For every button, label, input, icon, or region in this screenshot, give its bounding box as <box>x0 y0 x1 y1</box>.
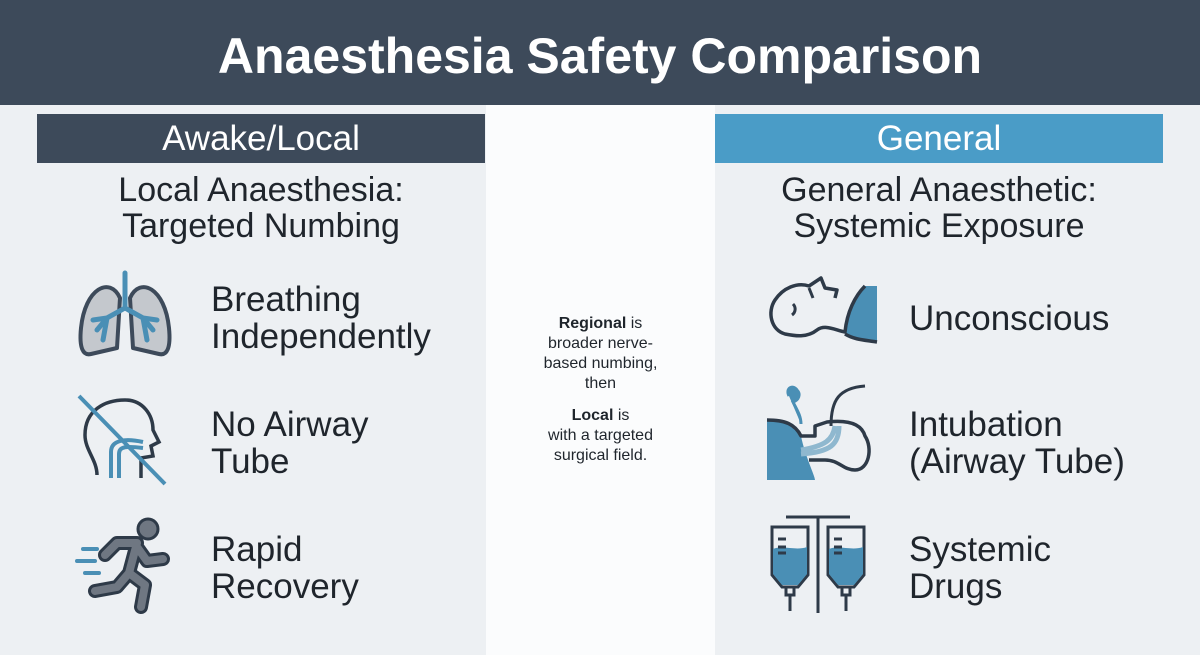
right subtitle: General Anaesthetic: <box>781 171 1097 209</box>
left header: Awake/Local <box>162 119 360 158</box>
left header <box>37 114 485 163</box>
icon: running person <box>75 518 170 614</box>
center column background <box>486 105 715 655</box>
text: rapid recovery <box>211 530 359 606</box>
left subtitle <box>118 171 404 245</box>
left subtitle: Local Anaesthesia: <box>118 171 404 209</box>
center note <box>544 315 657 464</box>
title bar: Anaesthesia Safety Comparison <box>218 28 982 84</box>
icon: lungs <box>78 270 172 356</box>
text: unconscious: Unconscious <box>909 299 1109 338</box>
text: systemic drugs: Systemic <box>909 530 1051 569</box>
right header: General <box>877 119 1001 158</box>
text: intubation <box>909 405 1125 481</box>
icon: intubation <box>767 384 871 480</box>
text: no airway: Tube <box>211 442 289 481</box>
text: rapid recovery: Rapid <box>211 530 302 569</box>
right header <box>715 114 1163 163</box>
center note: Regional is <box>559 315 642 332</box>
text: breathing <box>211 280 431 356</box>
text: systemic drugs: Drugs <box>909 567 1002 606</box>
right subtitle <box>781 171 1097 245</box>
icon: IV bags <box>770 516 866 613</box>
title bar <box>0 0 1200 105</box>
icon: unconscious head <box>769 276 878 344</box>
center note: surgical field. <box>554 447 647 464</box>
text: intubation: (Airway Tube) <box>909 442 1125 481</box>
text: rapid recovery: Recovery <box>211 567 359 606</box>
center note: based numbing, <box>544 355 657 372</box>
center note: broader nerve- <box>548 335 653 352</box>
text: no airway <box>211 405 369 481</box>
center note: with a targeted <box>548 427 653 444</box>
text: systemic drugs <box>909 530 1051 606</box>
icon: no airway tube <box>78 394 166 486</box>
text: no airway: No Airway <box>211 405 369 444</box>
text: breathing: Independently <box>211 317 431 356</box>
text: breathing: Breathing <box>211 280 361 319</box>
center note: then <box>585 375 616 392</box>
left subtitle: Targeted Numbing <box>122 207 400 245</box>
text: intubation: Intubation <box>909 405 1063 444</box>
right subtitle: Systemic Exposure <box>794 207 1084 245</box>
center note: Local is <box>572 407 629 424</box>
